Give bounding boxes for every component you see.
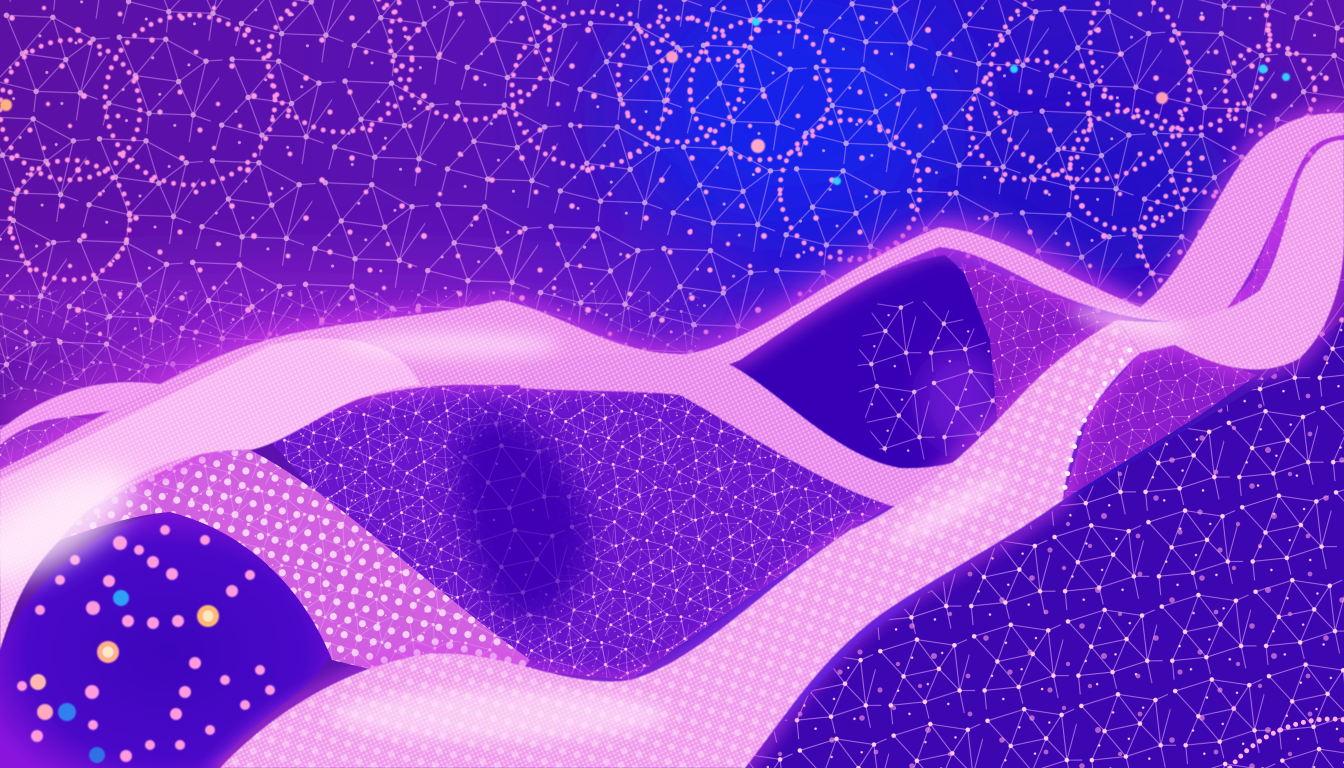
ribbon: upper wave	[0, 113, 1344, 560]
lower left lattice arch	[60, 450, 530, 700]
central lattice field	[260, 385, 900, 680]
ribbon: right loop	[1117, 140, 1344, 369]
small network: bottom right corner arc	[1230, 719, 1344, 768]
dark hole: centre-right	[700, 255, 1008, 486]
network mesh: upper-left lower edge	[0, 290, 700, 400]
bright dotted edge: front ribbon	[1063, 350, 1130, 500]
ribbon: middle wave	[520, 353, 1060, 511]
ribbon: bright left band	[0, 338, 420, 650]
lower left hole with bokeh nodes	[0, 512, 332, 768]
ribbon: far left crest	[0, 382, 180, 445]
network mesh: upper field	[0, 0, 1344, 380]
ribbon: front wave	[220, 320, 1140, 768]
dark hole: centre-left	[456, 417, 590, 620]
scattered particles: upper field	[0, 0, 1344, 340]
network mesh: lower right field	[740, 320, 1344, 768]
glowing nodes: top field	[0, 18, 1290, 185]
lattice region: upper right loop	[960, 160, 1307, 500]
dotted rings: top field	[0, 0, 1315, 290]
bright glow: left edge	[0, 445, 151, 605]
lattice region: far left	[0, 415, 130, 490]
particle dust above ribbons	[0, 95, 1344, 440]
bright glow: ribbon crossings	[330, 302, 1191, 741]
